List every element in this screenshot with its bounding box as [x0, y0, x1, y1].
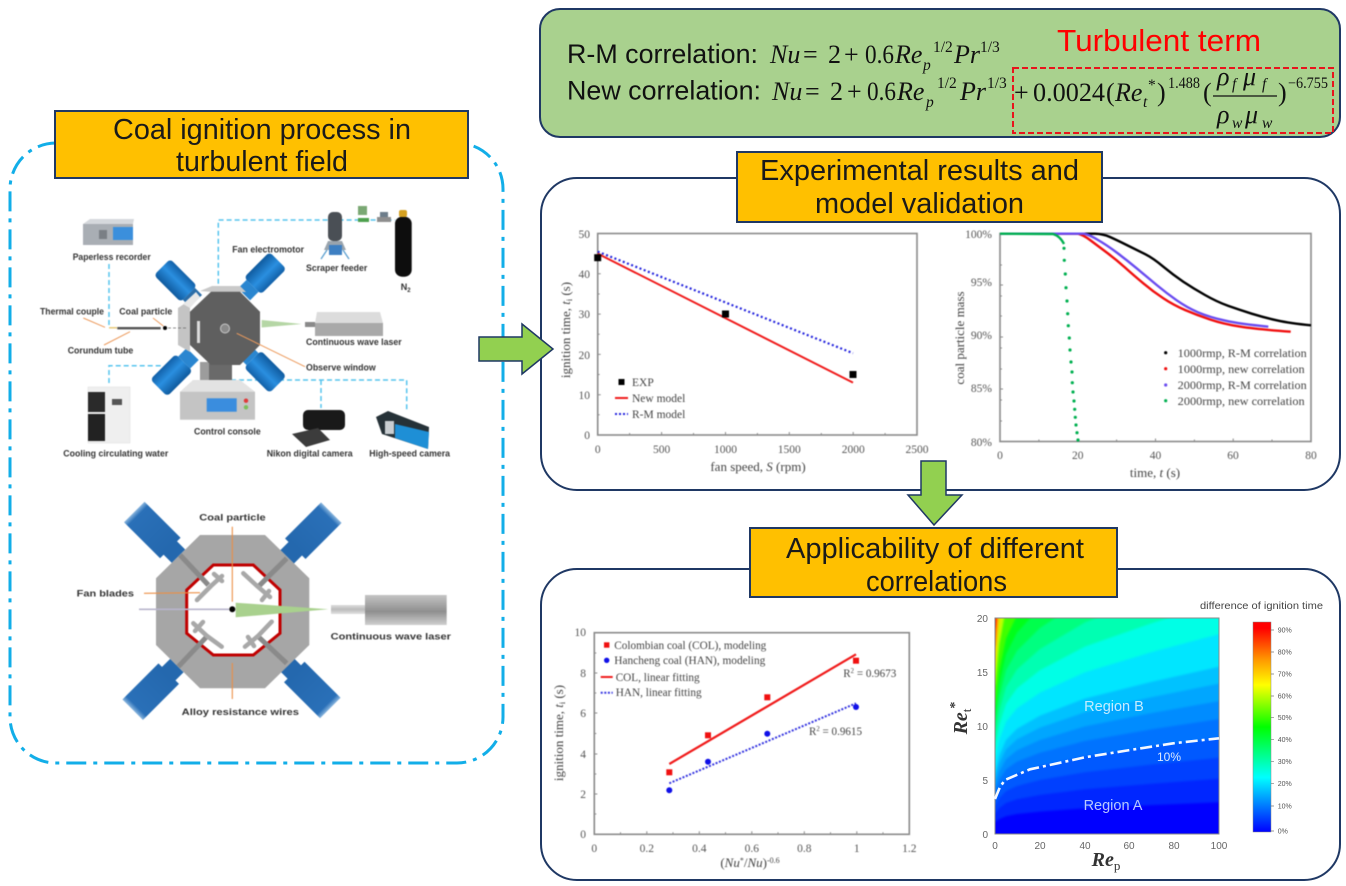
formula: new correlation: 0.0024 [1033, 78, 1105, 107]
panel outline [541, 178, 1340, 490]
axis tick labels: 10 [977, 722, 988, 733]
cross-section labels: Coal particle [199, 513, 266, 523]
grey octagonal shell [156, 535, 309, 688]
icon: cooling water unit [88, 387, 130, 443]
formula: new correlation: f [1232, 76, 1239, 93]
axis tick labels: 2 [580, 789, 586, 801]
annotation: HAN R-squared: = 0.9615 [820, 726, 862, 738]
legend [615, 377, 685, 421]
axis tick labels: 40 [1150, 450, 1162, 462]
formula: new correlation: ) [1157, 78, 1166, 107]
heading: applicability: Applicability of different [786, 533, 1084, 565]
line chart: ignition time vs fan speed [558, 229, 929, 474]
legend: HAN, linear fitting [616, 687, 702, 699]
colour bar: 40% [1278, 737, 1292, 744]
blue motors [122, 502, 342, 720]
colour bar: 70% [1278, 672, 1292, 678]
laser beam [236, 603, 328, 617]
formula: new correlation: 2 [830, 77, 843, 106]
apparatus labels [40, 244, 451, 459]
apparatus labels: High-speed camera [369, 449, 451, 459]
icon: console neck [200, 362, 232, 386]
legend: 2000rmp, new correlation [1178, 396, 1305, 408]
connection lines [109, 220, 407, 412]
axis tick labels: 0 [580, 829, 586, 841]
axis tick labels: 40 [1079, 841, 1091, 852]
heading: experimental results: Experimental results and [760, 155, 1079, 187]
apparatus labels: Paperless recorder [73, 252, 151, 262]
particle holder: corundum tube and coal particle [109, 326, 186, 330]
fan shafts [178, 555, 287, 667]
axis title: Nu ratio: / [744, 855, 748, 870]
axis title: Re_t*: * [948, 702, 963, 709]
annotation: COL R-squared: 2 [851, 667, 855, 675]
axis tick labels: 1.2 [902, 843, 917, 855]
axis tick labels: 95% [971, 277, 992, 289]
annotation: COL R-squared: R [843, 668, 851, 680]
contour bands [996, 618, 1218, 834]
axis tick labels: 500 [653, 444, 670, 456]
apparatus labels: 2 [407, 288, 411, 294]
plot frame [594, 633, 909, 834]
axis tick labels: 0.4 [692, 843, 707, 855]
formula: new correlation: Nu [771, 77, 802, 106]
formula: new correlation [771, 62, 1328, 132]
axis title: ignition time: i [565, 298, 574, 301]
axis tick labels: 1000 [714, 444, 737, 456]
diagram: chamber cross-section [77, 502, 452, 720]
axis title: ignition time: ignition time, t [551, 704, 566, 781]
axis tick labels [965, 229, 1317, 462]
series: 1000 rpm new [1000, 234, 1291, 332]
legend [601, 640, 767, 699]
formula: new correlation: + [847, 77, 862, 106]
axis tick labels [574, 627, 917, 855]
icon: N2 cylinder [395, 210, 412, 277]
icon: Nikon digital camera [292, 410, 345, 447]
axis tick labels: 20 [1034, 841, 1046, 852]
heading: applicability: correlations [866, 566, 1007, 598]
axis tick labels: 60 [1227, 450, 1239, 462]
axis tick labels: 0.2 [640, 843, 654, 855]
red alloy resistance wire [187, 565, 280, 655]
formula: new correlation: t [1143, 94, 1148, 111]
colour bar: 10% [1278, 804, 1292, 810]
colour bar: 20% [1278, 781, 1292, 788]
legend: R-M model [632, 409, 685, 421]
formula: R-M correlation: Pr [953, 40, 981, 69]
axis tick labels: 0 [997, 450, 1003, 462]
legend: Colombian coal (COL), modeling [614, 640, 767, 652]
formula: R-M correlation: 0.6 [865, 40, 894, 69]
axis tick labels: 1 [854, 843, 860, 855]
arrow: down [908, 461, 962, 525]
formula: new correlation: = [805, 77, 820, 106]
legend: Hancheng coal (HAN), modeling [614, 655, 766, 667]
heading: coal ignition process: turbulent field [176, 146, 348, 178]
series: 2000 rpm R-M [1000, 234, 1268, 327]
icon: gas valves [358, 206, 391, 222]
axis tick labels: 50 [578, 229, 590, 241]
colour bar title: difference of ignition time [1200, 601, 1323, 612]
icon: paperless recorder [83, 219, 134, 245]
formula: R-M correlation: Nu [769, 40, 800, 69]
axis title: ignition time: (s) [558, 282, 573, 299]
axis tick labels: 15 [977, 668, 988, 679]
formula: new correlation: p [925, 94, 934, 111]
formula: new correlation: μ [1244, 100, 1258, 129]
formula: new correlation: + [1014, 78, 1029, 107]
axis title: ignition time: ignition time, t [558, 301, 573, 378]
axis tick labels: 4 [580, 749, 586, 761]
apparatus labels: Scraper feeder [306, 263, 368, 273]
series: COL points [666, 658, 859, 775]
formula: new correlation: 1.488 [1168, 75, 1200, 92]
heading: coal ignition process: Coal ignition process in [113, 114, 411, 146]
plot frame [995, 618, 1219, 834]
axis tick labels: 0.6 [745, 843, 759, 855]
apparatus labels: N [401, 282, 407, 292]
colour bar [1253, 622, 1292, 836]
series: HAN points [666, 704, 859, 793]
formula: R-M correlation: 2 [828, 40, 841, 69]
axis title: ignition time: (s) [551, 685, 566, 702]
axis title: Nu ratio: Nu) [747, 855, 767, 870]
formula: new correlation: Re [1114, 78, 1142, 107]
apparatus labels: Coal particle [119, 306, 172, 316]
leader lines [83, 318, 305, 367]
formula: new correlation: Re [896, 77, 924, 106]
contour map: difference of ignition time [950, 602, 1322, 872]
axis tick labels: 85% [971, 383, 992, 395]
axis tick labels: 8 [580, 668, 586, 680]
fan blades [193, 573, 272, 647]
apparatus labels: Cooling circulating water [63, 449, 169, 459]
scatter chart: ignition time vs Nu ratio [551, 627, 917, 870]
formula: new correlation: 1/2 [937, 75, 957, 92]
formula: new correlation: ( [1203, 78, 1212, 107]
formula: R-M correlation: 1/3 [980, 39, 1000, 56]
icon: reaction chamber [178, 286, 260, 365]
panel: coal ignition process [10, 111, 503, 763]
colour bar: 60% [1278, 694, 1292, 700]
heading: experimental results: model validation [815, 188, 1024, 220]
axis tick labels [578, 229, 929, 456]
leader lines [144, 527, 232, 699]
axis tick labels: 0 [595, 444, 601, 456]
axis title: Re_p: p [1114, 858, 1120, 873]
apparatus labels: Control console [194, 426, 261, 436]
axis tick labels: 0 [584, 430, 590, 442]
formula: R-M correlation: Re [894, 40, 922, 69]
line chart: coal particle mass vs time [952, 229, 1317, 480]
laser body [331, 595, 447, 625]
10% contour line [995, 738, 1219, 799]
legend [1164, 348, 1307, 408]
axis tick labels: 80 [1168, 841, 1180, 852]
formula: new correlation: 0.6 [867, 77, 896, 106]
annotation: COL R-squared: = 0.9673 [854, 668, 897, 680]
icon: blue fan motors [150, 252, 286, 396]
panel: correlations [540, 9, 1340, 137]
legend: 2000rmp, R-M correlation [1178, 380, 1307, 392]
axis tick labels: 80 [1305, 450, 1317, 462]
formula: new correlation: f [1262, 76, 1269, 93]
series: new model [598, 254, 853, 383]
axis title: Re_t*: Re [950, 712, 972, 734]
axis tick labels: 2000 [842, 444, 865, 456]
formula: new correlation: ρ [1216, 100, 1229, 129]
label: region A: Region A [1084, 798, 1143, 814]
formula: R-M correlation: 1/2 [933, 39, 953, 56]
formula: new correlation: Pr [959, 77, 987, 106]
highlight box: turbulent term [1013, 68, 1333, 133]
axis tick labels: 80% [971, 437, 992, 449]
heading: experimental results [737, 152, 1102, 222]
axis tick labels: 2500 [906, 444, 929, 456]
axis tick labels [977, 614, 1228, 852]
apparatus labels: Nikon digital camera [267, 449, 354, 459]
apparatus labels: Observe window [306, 362, 377, 372]
panel: experimental results and model validation [541, 152, 1340, 490]
colour bar: 30% [1278, 759, 1292, 766]
apparatus labels: Continuous wave laser [306, 337, 402, 347]
label: region B: Region B [1084, 699, 1144, 715]
panel outline [10, 143, 503, 763]
colour bar: 50% [1278, 715, 1292, 722]
axis tick labels: 10 [578, 390, 590, 402]
icon: continuous wave laser [305, 312, 383, 336]
axis tick labels: 6 [580, 708, 586, 720]
formula: new correlation: * [1148, 77, 1156, 94]
annotation: HAN R-squared: R [809, 726, 817, 738]
diagram: experimental apparatus [40, 206, 451, 459]
axis tick labels: 20 [1072, 450, 1084, 462]
apparatus labels: Corundum tube [68, 345, 133, 355]
colour bar: 90% [1278, 628, 1292, 634]
apparatus labels: Thermal couple [40, 306, 104, 316]
axis tick labels: 60 [1123, 841, 1135, 852]
axis tick labels: 0 [992, 841, 998, 852]
axis title: Re_p: Re [1092, 849, 1114, 871]
coal particle [229, 606, 235, 612]
axis tick labels: 5 [982, 776, 988, 787]
axis title: Nu ratio: (Nu [720, 855, 740, 870]
particle feed rod [139, 608, 229, 610]
heading: coal ignition process [55, 111, 468, 178]
cross-section labels: Alloy resistance wires [182, 707, 299, 717]
axis tick labels: 0 [591, 843, 597, 855]
legend: 1000rmp, R-M correlation [1178, 348, 1307, 360]
axis tick labels: 30 [578, 309, 590, 321]
formula: new correlation: w [1232, 115, 1243, 132]
series: 2000 rpm new [1000, 234, 1080, 442]
axis tick labels: 90% [971, 330, 992, 342]
plot frame [598, 234, 917, 435]
icon: high-speed camera [376, 411, 429, 449]
axis title: Re_t*: t [959, 708, 974, 712]
plot frame [1000, 234, 1311, 442]
axis tick labels: 100% [965, 229, 992, 241]
formula: new correlation: ρ [1216, 62, 1229, 91]
axis tick labels: 40 [578, 269, 590, 281]
legend: New model [632, 393, 685, 405]
formula: new correlation: μ [1242, 62, 1256, 91]
axis title: Nu ratio: -0.6 [767, 856, 780, 865]
formula: new correlation: ) [1278, 78, 1287, 107]
legend: EXP [632, 377, 654, 389]
panel outline [541, 569, 1340, 880]
axis tick labels: 10 [574, 627, 586, 639]
icon: control console [180, 380, 255, 420]
formula: new correlation: w [1262, 115, 1273, 132]
formula: new correlation: −6.755 [1288, 75, 1328, 92]
label: R-M correlation: R-M correlation: [567, 39, 758, 69]
formula: R-M correlation: p [922, 57, 931, 74]
axis tick labels: 0 [982, 830, 988, 841]
colour bar: 0% [1278, 828, 1288, 836]
formula: R-M correlation: + [844, 40, 859, 69]
axis tick labels: 1500 [778, 444, 801, 456]
label: 10%: 10% [1157, 750, 1181, 764]
axis tick labels: 20 [578, 350, 590, 362]
panel: applicability of different correlations [541, 500, 1340, 880]
colour bar: 80% [1278, 650, 1292, 656]
series: 1000 rpm R-M [1000, 234, 1311, 325]
axis tick labels: 20 [977, 614, 988, 625]
axis title: Nu ratio: * [740, 856, 744, 865]
icon: laser beam [262, 320, 302, 328]
fit line: HAN [669, 703, 856, 783]
axis tick labels: 100 [1211, 841, 1228, 852]
cross-section labels: Fan blades [77, 589, 134, 599]
fit line: COL [669, 654, 856, 764]
cross-section labels: Continuous wave laser [331, 631, 452, 641]
annotation: HAN R-squared: 2 [816, 725, 820, 733]
series: R-M model [598, 252, 853, 353]
formula: R-M correlation [769, 39, 1000, 74]
axis title: coal particle mass: coal particle mass [952, 291, 967, 385]
legend: COL, linear fitting [616, 672, 700, 684]
label: new correlation: New correlation: [567, 76, 761, 106]
axis tick labels: 0.8 [797, 843, 812, 855]
series: EXP points [594, 254, 856, 378]
heading: turbulent term: Turbulent term [1057, 23, 1261, 58]
arrow: right [479, 324, 553, 374]
heading: applicability [750, 528, 1117, 598]
formula: R-M correlation: = [803, 40, 818, 69]
green panel background [540, 9, 1340, 137]
cross-section labels [77, 513, 452, 717]
axis title: time: time, t (s) [1130, 465, 1180, 480]
formula: new correlation: 1/3 [987, 75, 1007, 92]
formula: new correlation: ( [1106, 78, 1115, 107]
apparatus labels: Fan electromotor [232, 244, 304, 254]
axis title: ignition time: i [558, 701, 567, 704]
legend: 1000rmp, new correlation [1178, 364, 1305, 376]
axis title: fan speed: fan speed, S (rpm) [710, 459, 806, 474]
icon: scraper feeder [321, 212, 349, 259]
